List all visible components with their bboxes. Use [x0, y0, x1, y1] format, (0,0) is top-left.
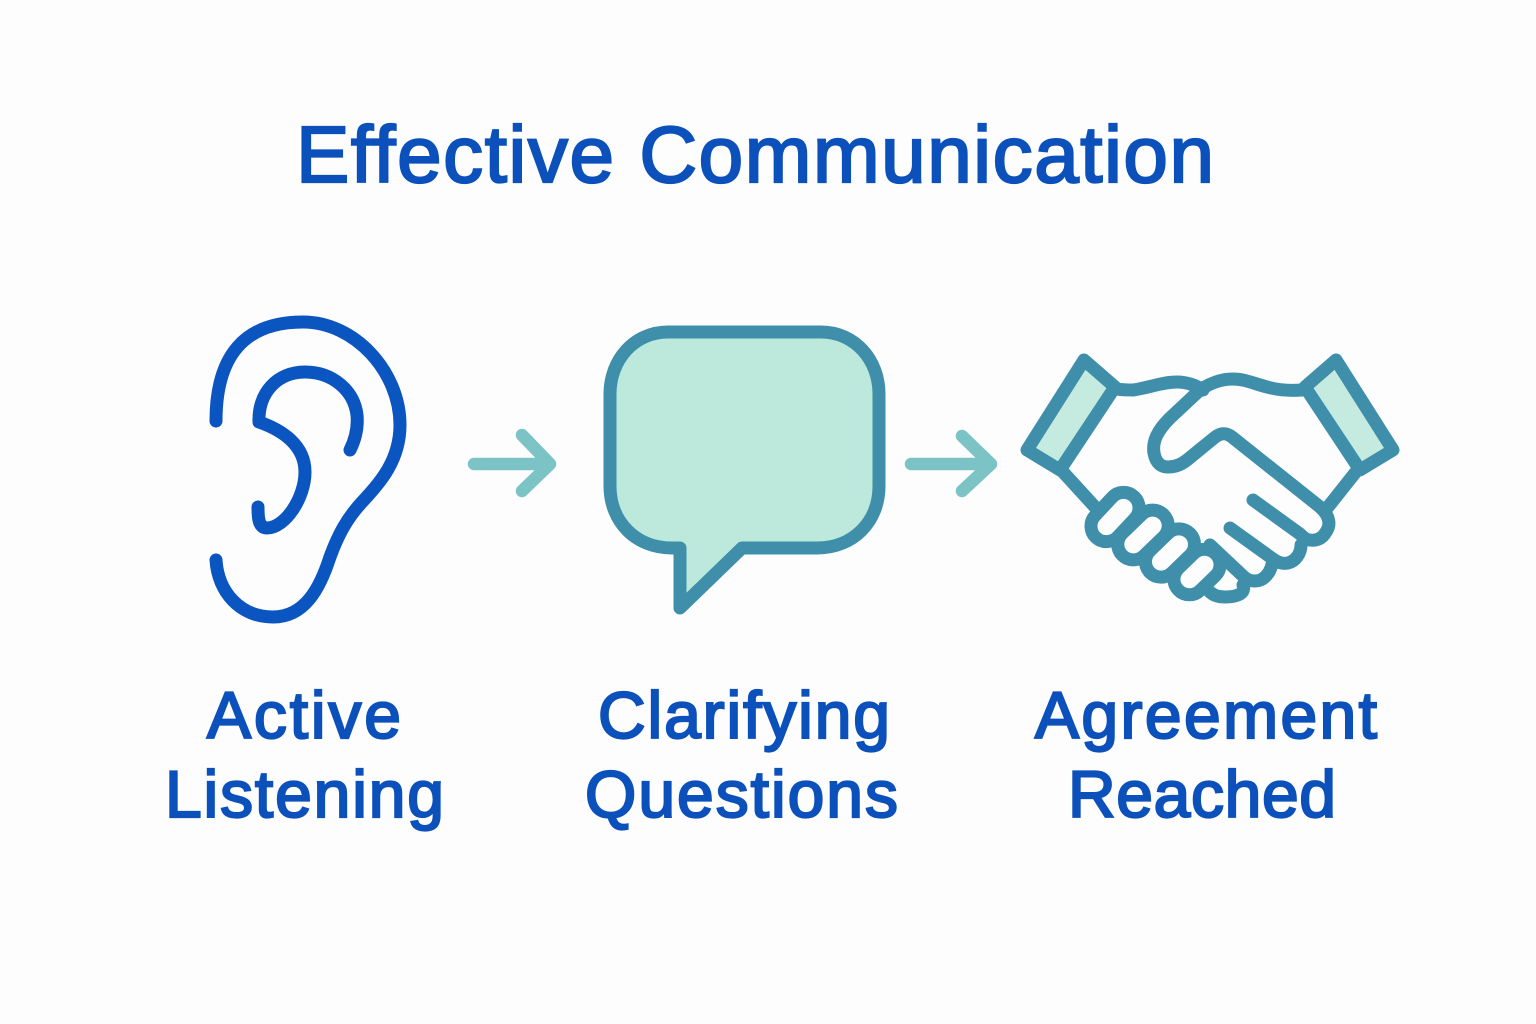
- icon: ear: [216, 322, 400, 617]
- finger loops: [1085, 486, 1244, 601]
- right cuff: [1305, 360, 1393, 470]
- label: agreement reached: Agreement: [1035, 678, 1377, 752]
- label: active listening: Listening: [165, 757, 444, 831]
- label: active listening: Active: [207, 678, 401, 752]
- label: agreement reached: [1035, 678, 1377, 831]
- left cuff: [1027, 360, 1115, 470]
- label: clarifying questions: Questions: [585, 757, 898, 831]
- label: agreement reached: Reached: [1068, 757, 1336, 831]
- label: clarifying questions: Clarifying: [598, 678, 890, 752]
- icon: speech bubble: [610, 332, 879, 608]
- left arm: [1063, 382, 1203, 507]
- label: clarifying questions: [585, 678, 898, 831]
- title: Effective Communication: [296, 110, 1214, 199]
- right hand: [1154, 379, 1329, 540]
- label: active listening: [165, 678, 444, 831]
- arrow: listening to questions: [474, 435, 550, 491]
- arrow: questions to agreement: [911, 436, 991, 491]
- icon: handshake: [1027, 360, 1393, 601]
